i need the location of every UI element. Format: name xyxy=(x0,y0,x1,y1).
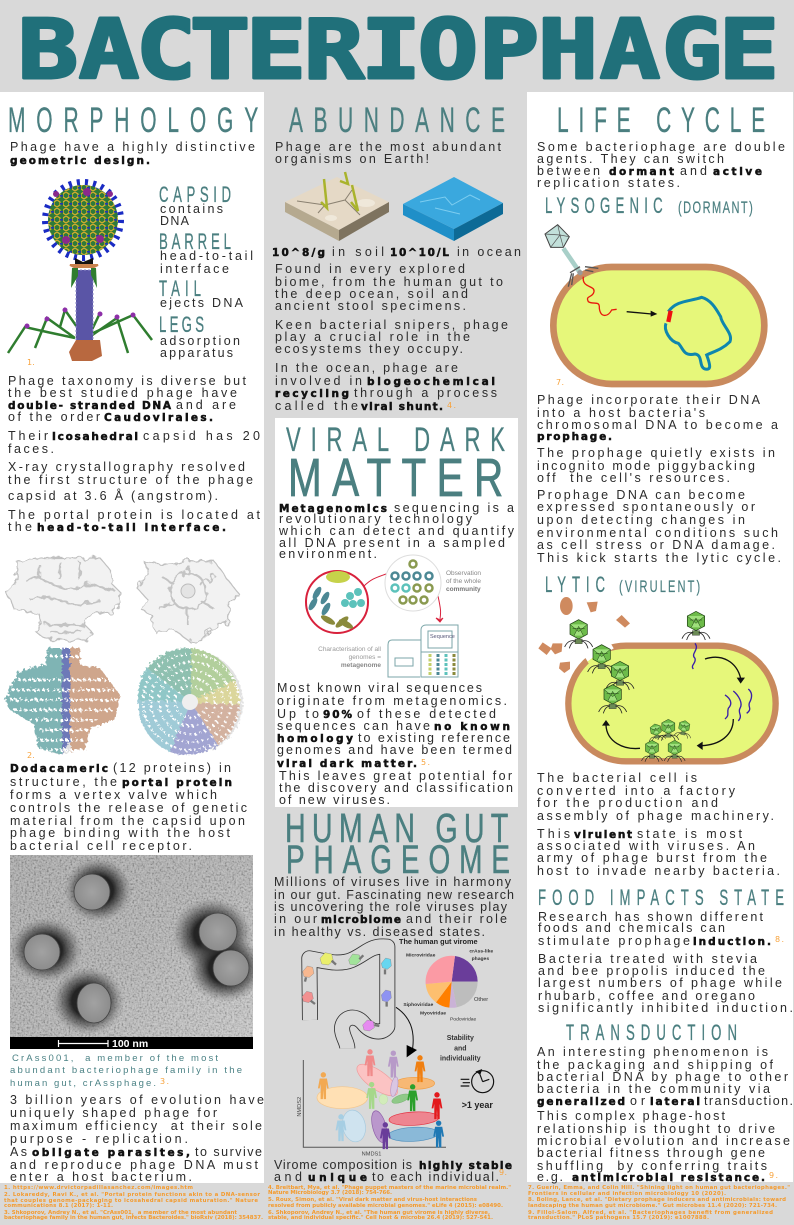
text: obligate parasites: and reproduce phage DNA must xyxy=(10,1158,259,1172)
heading: lysogenic: (DORMANT) xyxy=(678,199,753,218)
text: transduction: bacteria in the community via xyxy=(537,1082,770,1096)
text: dodecameric: forms a vertex valve which xyxy=(10,788,217,802)
references: right column: Frontiers in cellular and infection microbiology 10 (2020). xyxy=(528,1191,726,1197)
panel: abundance xyxy=(272,102,521,413)
caption: CrAss001: human gut, crAssphage. xyxy=(10,1078,156,1089)
text: virulent: This xyxy=(537,827,570,841)
text: portal protein: The portal protein is located at xyxy=(8,508,261,522)
image: portal protein surfaces and ribbons: 2. xyxy=(27,751,35,760)
panel: viral dark matter xyxy=(275,418,518,807)
text: ocean: biogeochemical xyxy=(367,376,495,388)
references: left column: bacteriophage family in the human gut, infects Bacteroides." bioRxiv (2018): 354837. xyxy=(4,1215,263,1221)
text: ocean: through a process xyxy=(354,386,497,400)
pie labels: Siphoviridae xyxy=(403,1002,433,1008)
text: composition: 9. xyxy=(499,1168,507,1177)
references: right column xyxy=(528,1185,790,1221)
stability label: individuality xyxy=(440,1056,481,1063)
text: dodecameric xyxy=(10,761,247,853)
heading: phageome: PHAGEOME xyxy=(286,838,510,882)
text: potential xyxy=(279,769,513,807)
intro text: Phage have a highly distinctive xyxy=(10,140,255,154)
image: portal protein surfaces and ribbons xyxy=(5,558,243,760)
text: factory xyxy=(537,771,774,823)
text: induction: stimulate prophage xyxy=(538,934,690,948)
text: gut intro: in our xyxy=(274,912,317,926)
text: expression: as cell stress or DNA damage. xyxy=(537,538,775,552)
cell fragments xyxy=(538,597,630,673)
text: potential: This leaves great potential for xyxy=(279,769,512,783)
text: virulent: host to invade nearby bacteria. xyxy=(537,864,780,878)
references: middle column: 4. Breitbart, Mya, et al. "Phage puppet masters of the marine microbial realm." xyxy=(268,1185,511,1191)
label: barrel xyxy=(159,230,253,276)
heading: lysogenic xyxy=(545,194,753,218)
label: tail: TAIL xyxy=(159,277,201,301)
heading: lytic: LYTIC xyxy=(545,573,605,597)
diagram: metagenomics workflow: Observation xyxy=(446,570,481,577)
text: snipers: ecosystems they occupy. xyxy=(275,342,463,356)
text: double agents: replication states. xyxy=(537,176,680,190)
text: dodecameric: phage binding with the host xyxy=(10,826,231,840)
icon: ocean block xyxy=(403,177,503,241)
text: double agents: dormant xyxy=(609,166,674,178)
text: ocean: recycling xyxy=(275,388,349,400)
text: expression xyxy=(537,488,781,565)
text: obligate parasites xyxy=(10,1145,262,1184)
text: evolution: uniquely shaped phage for xyxy=(10,1106,217,1120)
text: incognito: off the cell's resources. xyxy=(537,471,730,485)
intro text: geometric design. xyxy=(10,155,150,167)
text: host relationship xyxy=(537,1109,790,1184)
text: obligate parasites: obligate parasites, xyxy=(32,1147,190,1159)
caption: CrAss001: 3. xyxy=(160,1077,169,1086)
text: viral sequences: homology xyxy=(277,733,353,745)
stats labels xyxy=(272,245,521,259)
references: right column: 9. Fillol-Salom, Alfred, et al. "Bacteriophages benefit from generalized xyxy=(528,1210,773,1216)
text: composition: to each individual. xyxy=(372,1170,499,1184)
stats labels: in ocean xyxy=(457,245,521,259)
pie labels xyxy=(399,937,493,1022)
pie labels: Microviridae xyxy=(406,953,436,959)
references: middle column: stable, and individual specific." Cell host & microbe 26.4 (2019): 527-541. xyxy=(268,1215,493,1221)
text: metagenomics: sequencing is a xyxy=(394,501,514,515)
text: ocean: involved in xyxy=(275,374,362,388)
heading: lytic xyxy=(545,573,700,597)
text: incorporate: into a host bacteria's xyxy=(537,406,705,420)
text: stevia: Bacteria treated with stevia xyxy=(538,952,757,966)
cycle arrows xyxy=(606,657,741,749)
axis labels: NMDS2 xyxy=(297,1097,303,1117)
people figures xyxy=(318,1049,444,1149)
stats labels: in soil xyxy=(332,245,384,259)
text: double agents: active xyxy=(713,166,762,178)
text: viral sequences: Most known viral sequences xyxy=(277,681,482,695)
references: middle column: Nature Microbiology 3.7 (2018): 754-766. xyxy=(268,1190,392,1196)
text: gut intro: Millions of viruses live in harmony xyxy=(274,875,512,889)
label: barrel: head-to-tail xyxy=(160,249,253,263)
text: metagenomics: environment. xyxy=(279,547,377,561)
diagram: metagenomics workflow: of the whole xyxy=(446,578,481,585)
text: double agents xyxy=(537,140,785,190)
pie labels: Podoviridae xyxy=(450,1016,477,1022)
icon: clock xyxy=(461,1070,494,1093)
label: capsid: DNA xyxy=(160,214,190,228)
text: evolution xyxy=(10,1093,264,1146)
label: tail: ejects DNA xyxy=(160,296,244,310)
text: viral sequences: originate from metagenomics. xyxy=(277,694,507,708)
text: host relationship: This complex phage-host xyxy=(537,1109,726,1123)
text: metagenomics: Metagenomics xyxy=(279,503,387,515)
pie labels: phages xyxy=(472,956,489,962)
text: crystallography: capsid at 3.6 Å (angstrom). xyxy=(8,488,218,503)
references: left column: 2. Lokareddy, Ravi K., et al. "Portal protein functions akin to a DNA-sensor xyxy=(4,1192,260,1198)
heading: matter: MATTER xyxy=(288,448,503,508)
label: barrel: interface xyxy=(160,262,229,276)
arrow xyxy=(396,1007,417,1057)
references: right column: 7. Guerin, Emma, and Colin Hill. "Shining light on human gut bacteriophages." xyxy=(528,1185,790,1191)
icon: soil block xyxy=(285,172,389,241)
diagram: metagenomics workflow: genomes = xyxy=(349,654,381,661)
text: induction: foods and chemicals can xyxy=(538,921,725,935)
text: factory: The bacterial cell is xyxy=(537,771,697,785)
text: biome: ancient stool specimens. xyxy=(275,299,466,313)
image: electron micrograph: 100 nm xyxy=(112,1038,148,1050)
heading: viral dark: VIRAL DARK xyxy=(286,421,505,459)
icon: phage structure model xyxy=(8,183,152,367)
references: left column: 3. Shkoporov, Andrey N., et al. "CrAss001, a member of the most abundant xyxy=(4,1210,237,1216)
text: viral sequences xyxy=(277,681,512,770)
text: composition: highly stable xyxy=(419,1160,512,1172)
text: viral sequences: to existing reference xyxy=(358,731,510,745)
text: dodecameric: material from the capsid upon xyxy=(10,814,245,828)
text: virulent: associated with viruses. An xyxy=(537,839,755,853)
text: ocean: In the ocean, phage are xyxy=(275,361,458,375)
text: induction: Research has shown different xyxy=(538,910,764,924)
text: induction: induction. xyxy=(693,936,771,948)
references: left column: 1. https://www.drvictorpadillasanchez.com/images.htm xyxy=(4,1185,193,1191)
stability label: >1 year xyxy=(462,1100,493,1110)
bacterium with burst xyxy=(568,645,776,761)
text: biome: Found in every explored xyxy=(275,262,465,276)
diagram: metagenomics workflow: community xyxy=(446,586,481,593)
stats labels: 10^10/L xyxy=(390,247,449,259)
axis labels: NMDS1 xyxy=(362,1151,381,1157)
text: expression: This kick starts the lytic cycle. xyxy=(537,551,781,565)
caption: CrAss001: CrAss001, a member of the most xyxy=(12,1053,218,1064)
phage particles xyxy=(565,611,710,762)
text: incorporate: prophage. xyxy=(537,431,612,443)
text: factory: converted into a factory xyxy=(537,784,736,798)
viral DNA xyxy=(583,277,617,315)
text: capsid faces: Icosahedral xyxy=(52,431,138,443)
heading: abundance: ABUNDANCE xyxy=(289,102,505,140)
text: virulent: virulent xyxy=(574,829,632,841)
text: biome xyxy=(275,262,503,313)
text: crystallography: the first structure of the phage xyxy=(8,473,253,487)
text: taxonomy: Phage taxonomy is diverse but xyxy=(8,374,247,388)
references: right column: 8. Boling, Lance, et al. "Dietary prophage inducers and antimicrobials: toward xyxy=(528,1197,786,1203)
pie labels: crAss-like xyxy=(469,949,493,955)
diagram: metagenomics workflow xyxy=(306,555,481,677)
text: biome: biome, from the human gut to xyxy=(275,275,503,289)
text: host relationship: shuffling by conferring traits xyxy=(537,1159,767,1173)
panel: human gut phageome xyxy=(274,806,514,1184)
label: legs: apparatus xyxy=(160,346,233,360)
references: middle column: resolved from publicly available microbial genomes." eLife 4 (2015): e08490. xyxy=(268,1203,503,1209)
references: middle column xyxy=(268,1185,511,1221)
text: obligate parasites: As xyxy=(10,1145,27,1159)
references: right column: landscaping the human gut microbiome." Gut microbes 11.4 (2020): 721-734. xyxy=(528,1203,777,1209)
prophage insert xyxy=(668,311,671,322)
host chromosome xyxy=(665,297,731,369)
text: metagenomics xyxy=(278,501,515,561)
text: stevia: and bee propolis induced the xyxy=(538,964,765,978)
text: viral sequences: 5. xyxy=(421,758,430,767)
text: taxonomy: of the order xyxy=(8,410,100,424)
text: metagenomics: which can detect and quantify xyxy=(278,524,515,538)
text: gut intro xyxy=(274,875,514,939)
stability label: and xyxy=(454,1045,467,1052)
icon: phage structure model: 1. xyxy=(27,358,35,367)
text: capsid faces xyxy=(8,429,260,456)
text: double agents: between xyxy=(537,164,600,178)
text: metagenomics: revolutionary technology xyxy=(279,512,473,526)
heading: life cycle: LIFE CYCLE xyxy=(557,102,765,140)
references: middle column: 5. Roux, Simon, et al. "Viral dark matter and virus-host interactions xyxy=(268,1197,477,1203)
virus icons in gut xyxy=(302,953,391,1031)
label: legs xyxy=(159,313,240,360)
text: snipers: Keen bacterial snipers, phage xyxy=(275,318,508,332)
text: host relationship: antimicrobial resistance. xyxy=(572,1172,765,1184)
diagram: lytic cycle xyxy=(538,597,776,762)
heading: transduction: TRANSDUCTION xyxy=(566,1021,737,1045)
text: transduction: the packaging and shipping of xyxy=(537,1058,774,1072)
text: induction: 8. xyxy=(775,935,784,944)
image: electron micrograph xyxy=(10,855,264,1050)
text: dodecameric: controls the release of genetic xyxy=(10,801,247,815)
text: transduction xyxy=(537,1045,793,1108)
references: left column: communications 8.1 (2017): 1-11. xyxy=(4,1203,113,1209)
arrowheads xyxy=(602,678,745,750)
text: expression: environmental conditions such xyxy=(537,526,778,540)
heading: food impacts state: FOOD IMPACTS STATE xyxy=(538,886,784,910)
text: host relationship: bacterial fitness through gene xyxy=(537,1146,765,1160)
text: gut intro: in our gut. Fascinating new research xyxy=(274,888,514,902)
pie labels: Other xyxy=(474,997,488,1003)
text: expression: Prophage DNA can become xyxy=(537,488,745,502)
bacterium xyxy=(553,267,764,384)
text: viral sequences: 90% xyxy=(323,709,352,721)
text: portal protein xyxy=(8,508,261,534)
ref 7: 7. xyxy=(556,378,564,387)
panel: life cycle xyxy=(527,92,793,1184)
scatter ellipses xyxy=(303,1059,446,1147)
text: viral sequences: genomes and have been termed xyxy=(277,743,512,757)
pie chart xyxy=(426,956,478,1008)
text: potential: of new viruses. xyxy=(279,793,390,807)
text: taxonomy: Caudovirales. xyxy=(104,412,213,424)
arrow xyxy=(627,311,657,317)
panel: morphology xyxy=(0,92,264,1184)
text: dodecameric: bacterial cell receptor. xyxy=(10,839,192,853)
text: virulent xyxy=(537,827,780,878)
text: factory: assembly of phage machinery. xyxy=(537,809,774,823)
text: incognito: The prophage quietly exists in xyxy=(537,446,775,460)
references: right column: transduction." PLoS pathogens 15.7 (2019): e1007888. xyxy=(528,1215,709,1221)
text: incorporate: chromosomal DNA to become a xyxy=(537,418,778,432)
text: dodecameric: structure, the xyxy=(10,775,117,789)
stability label xyxy=(440,1035,493,1110)
heading: lytic: (VIRULENT) xyxy=(619,578,700,597)
label: capsid xyxy=(159,183,231,228)
text: taxonomy xyxy=(8,374,247,424)
stats labels: 10^8/g xyxy=(272,247,325,259)
text: transduction: lateral xyxy=(650,1096,700,1108)
text: snipers: play a crucial role in the xyxy=(275,330,470,344)
text: portal protein: head-to-tail interface. xyxy=(37,522,226,534)
text: incognito xyxy=(537,446,775,485)
axis labels xyxy=(297,1097,381,1157)
text: taxonomy: the best studied phage have xyxy=(8,386,237,400)
text: crystallography xyxy=(8,460,253,503)
text: stevia: significantly inhibited induction. xyxy=(538,1001,793,1015)
text: ocean: viral shunt. xyxy=(361,401,443,413)
text: expression: expressed spontaneously or xyxy=(537,500,755,514)
text: evolution: purpose - replication. xyxy=(10,1132,188,1146)
caption: CrAss001: abundant bacteriophage family in the xyxy=(10,1065,242,1076)
text: potential: the discovery and classification xyxy=(279,781,513,795)
text: double agents: agents. They can switch xyxy=(537,152,724,166)
text: incognito: incognito mode piggybacking xyxy=(537,459,755,473)
text: stevia: largest numbers of phage while xyxy=(538,976,782,990)
text: taxonomy: double- stranded DNA xyxy=(8,400,172,412)
text: transduction: or xyxy=(630,1094,645,1108)
text: viral sequences: of these detected xyxy=(357,707,496,721)
text: taxonomy: and are xyxy=(176,398,236,412)
text: factory: for the production and xyxy=(537,796,718,810)
text: dodecameric: Dodacameric xyxy=(10,763,108,775)
text: gut intro: is uncovering the role viruses play xyxy=(274,900,508,914)
text: capsid faces: faces. xyxy=(8,442,54,456)
text: transduction: bacterial DNA by phage to other xyxy=(537,1070,788,1084)
stability label: Stability xyxy=(447,1035,474,1042)
text: capsid faces: capsid has 20 xyxy=(143,429,260,443)
diagram: metagenomics workflow: Sequence xyxy=(430,634,455,640)
caption: CrAss001 xyxy=(10,1053,242,1089)
label: legs: LEGS xyxy=(159,313,204,337)
text: host relationship: e.g. xyxy=(537,1170,563,1184)
text: obligate parasites: enter a host bacterium. xyxy=(10,1170,192,1184)
text: biome: the deep ocean, soil and xyxy=(275,287,468,301)
text: double agents: and xyxy=(680,164,707,178)
text: dodecameric: portal protein xyxy=(122,777,232,789)
text: host relationship: 9. xyxy=(769,1171,778,1180)
text: ocean: called the xyxy=(275,399,358,413)
label: capsid: contains xyxy=(160,202,223,216)
text: composition: unique xyxy=(308,1172,367,1184)
diagram: metagenomics workflow: metagenome xyxy=(341,662,381,669)
label: tail xyxy=(159,277,244,310)
text: transduction: An interesting phenomenon is xyxy=(537,1045,768,1059)
text: metagenomics: all DNA present in a sampled xyxy=(279,536,505,550)
text: virulent: state is most xyxy=(637,827,743,841)
text: transduction: generalized xyxy=(537,1096,625,1108)
text: crystallography: X-ray crystallography resolved xyxy=(8,460,245,474)
text: composition: and xyxy=(274,1170,302,1184)
text: ocean: 4. xyxy=(447,401,456,410)
colon outline xyxy=(309,946,387,1048)
text: ocean xyxy=(275,361,497,413)
text: virulent: army of phage burst from the xyxy=(537,851,767,865)
text: evolution: maximum efficiency at their sole xyxy=(10,1119,262,1133)
phage xyxy=(545,225,598,287)
intro: organisms on Earth! xyxy=(275,152,429,166)
intro xyxy=(275,140,502,166)
text: stevia: rhubarb, coffee and oregano xyxy=(538,989,755,1003)
intro: Phage are the most abundant xyxy=(275,140,502,154)
text: composition: Virome composition is xyxy=(274,1158,412,1172)
text: transduction: transduction. xyxy=(704,1094,793,1108)
label: legs: adsorption xyxy=(160,334,240,348)
heading: human gut: HUMAN GUT xyxy=(285,806,508,851)
intro text xyxy=(10,140,255,167)
heading: lysogenic: LYSOGENIC xyxy=(545,194,663,218)
text: stevia xyxy=(538,952,793,1015)
viral DNA strands xyxy=(692,643,752,721)
pie labels: The human gut virome xyxy=(399,937,478,946)
text: evolution: 3 billion years of evolution have xyxy=(10,1093,264,1107)
text: incorporate: Phage incorporate their DNA xyxy=(537,393,761,407)
text: viral sequences: Up to xyxy=(277,707,319,721)
text: dodecameric: (12 proteins) in xyxy=(113,761,231,775)
pie labels: Myoviridae xyxy=(420,1010,446,1016)
text: composition xyxy=(274,1158,512,1184)
text: portal protein: the xyxy=(8,520,32,534)
text: incorporate xyxy=(537,393,778,443)
text: expression: upon detecting changes in xyxy=(537,513,745,527)
text: host relationship: microbial evolution and increase xyxy=(537,1134,790,1148)
text: viral sequences: viral dark matter. xyxy=(277,758,417,770)
references: left column: that couples genome-packaging to icosahedral capsid maturation." Nature xyxy=(4,1198,258,1204)
text: gut intro: and their role xyxy=(406,912,507,926)
text: snipers xyxy=(275,318,508,356)
text: gut intro: in healthy vs. diseased states. xyxy=(274,925,485,939)
heading: morphology: MORPHOLOGY xyxy=(8,102,258,140)
text: gut intro: microbiome xyxy=(321,914,401,926)
references: left column xyxy=(4,1185,263,1221)
text: host relationship: relationship is thought to drive xyxy=(537,1122,775,1136)
title: BACTERIOPHAGE xyxy=(18,2,779,98)
diagram: metagenomics workflow: Characterisation of all xyxy=(318,646,382,653)
diagram: lysogenic cycle xyxy=(545,225,764,384)
label: capsid: CAPSID xyxy=(159,183,231,207)
text: capsid faces: Their xyxy=(8,429,48,443)
label: barrel: BARREL xyxy=(159,230,231,254)
text: obligate parasites: to survive xyxy=(195,1145,262,1159)
text: double agents: Some bacteriophage are double xyxy=(537,140,785,154)
text: induction xyxy=(538,910,784,948)
diagram: gut virome xyxy=(297,937,494,1157)
references: middle column: 6. Shkoporov, Andrey N., et al. "The human gut virome is highly diverse, xyxy=(268,1210,490,1216)
text: viral sequences: no known xyxy=(434,721,510,733)
text: viral sequences: sequences can have xyxy=(277,719,430,733)
